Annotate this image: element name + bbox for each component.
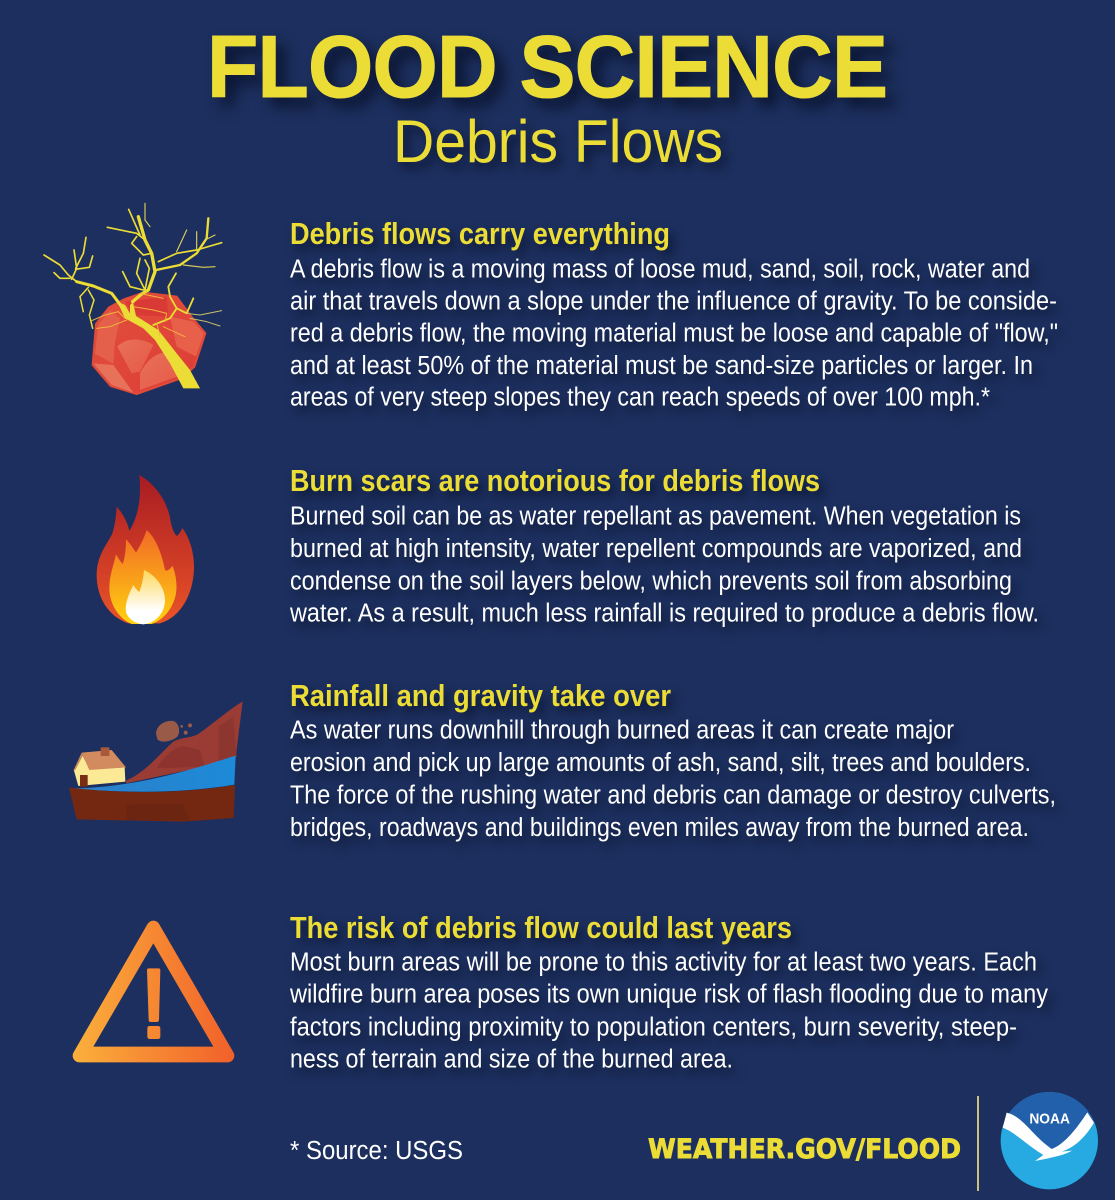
- heading: Debris flows carry everything: [290, 216, 670, 251]
- subtitle: Debris Flows: [393, 108, 723, 175]
- heading: Burn scars are notorious for debris flows: [290, 463, 820, 498]
- body text: [289, 502, 1039, 628]
- body text: air that travels down a slope under the influence of gravity. To be conside-: [290, 288, 1057, 316]
- source note: * Source: USGS: [290, 1137, 463, 1165]
- body text: ness of terrain and size of the burned area.: [290, 1046, 733, 1074]
- house: [73, 747, 126, 787]
- heading: Rainfall and gravity take over: [290, 678, 671, 713]
- section: rainfall and gravity: [290, 678, 1056, 842]
- heading: The risk of debris flow could last years: [290, 910, 792, 945]
- body text: factors including proximity to population centers, burn severity, steep-: [290, 1014, 1017, 1042]
- website link: WEATHER.GOV/FLOOD: [648, 1134, 961, 1165]
- footer divider: [977, 1096, 979, 1191]
- icon: house and landslide: [69, 701, 243, 822]
- body text: wildfire burn area poses its own unique risk of flash flooding due to many: [289, 980, 1048, 1008]
- body text: A debris flow is a moving mass of loose mud, sand, soil, rock, water and: [290, 256, 1030, 284]
- body text: erosion and pick up large amounts of ash, sand, silt, trees and boulders.: [290, 749, 1031, 777]
- logo: NOAA: [1001, 1092, 1098, 1189]
- body text: condense on the soil layers below, which prevents soil from absorbing: [290, 568, 1012, 596]
- icon: warning triangle: [79, 927, 228, 1056]
- title: FLOOD SCIENCE: [207, 18, 888, 116]
- section: risk could last years: [289, 910, 1048, 1074]
- body text: [290, 716, 1056, 842]
- icon: fire: [97, 475, 194, 624]
- body text: water. As a result, much less rainfall is required to produce a debris flow.: [289, 600, 1039, 628]
- body text: [289, 948, 1048, 1074]
- body text: As water runs downhill through burned areas it can create major: [290, 716, 954, 744]
- icon: rock with branches: [44, 203, 222, 394]
- boulder: [156, 721, 192, 742]
- body text: bridges, roadways and buildings even miles away from the burned area.: [290, 814, 1029, 842]
- body text: areas of very steep slopes they can reach speeds of over 100 mph.*: [290, 384, 990, 412]
- section: debris flows carry everything: [290, 216, 1058, 412]
- body text: burned at high intensity, water repellent compounds are vaporized, and: [290, 535, 1022, 563]
- body text: red a debris flow, the moving material must be loose and capable of "flow,": [290, 320, 1058, 348]
- body text: Burned soil can be as water repellant as pavement. When vegetation is: [290, 502, 1021, 530]
- logo: NOAA: NOAA: [1029, 1111, 1070, 1128]
- body text: [290, 256, 1058, 412]
- body text: The force of the rushing water and debris can damage or destroy culverts,: [290, 782, 1056, 810]
- body text: Most burn areas will be prone to this activity for at least two years. Each: [290, 948, 1037, 976]
- body text: and at least 50% of the material must be sand-size particles or larger. In: [290, 352, 1033, 380]
- section: burn scars: [289, 463, 1039, 628]
